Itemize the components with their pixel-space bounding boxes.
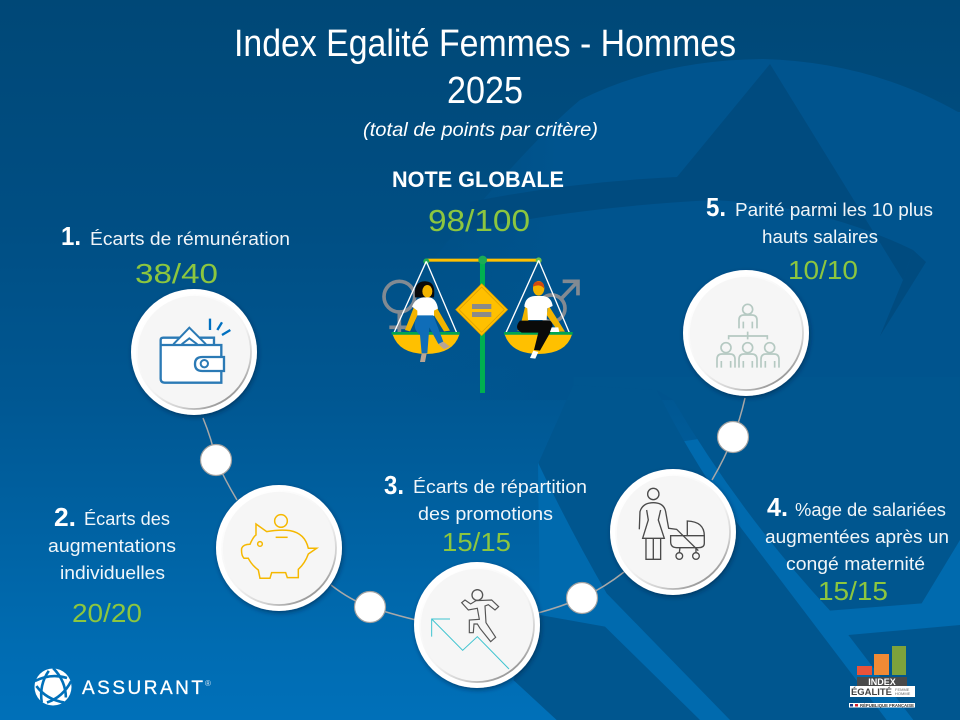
logo: Index Egalité: INDEX xyxy=(868,677,896,687)
logo: Index Egalité: RÉPUBLIQUE FRANÇAISE xyxy=(860,703,914,708)
score 4: 15/15 xyxy=(818,576,888,606)
icon: org chart xyxy=(717,304,779,368)
pole xyxy=(480,260,485,393)
logo: Assurant: ASSURANT xyxy=(82,678,203,699)
logo: Assurant xyxy=(34,667,211,706)
score 1: 38/40 xyxy=(135,258,218,289)
logo: Index Egalité: FEMME xyxy=(895,687,910,692)
right pan xyxy=(504,332,573,354)
criterion 3 label: Écarts de répartition xyxy=(413,477,587,497)
criterion 1 label: Écarts de rémunération xyxy=(90,229,290,249)
panel: maternity circle xyxy=(610,469,736,595)
criterion 3 label: des promotions xyxy=(418,504,553,524)
score 3: 15/15 xyxy=(442,527,511,557)
icon: Assurant mark xyxy=(34,667,74,706)
left pan xyxy=(392,332,460,354)
criterion 1 label xyxy=(61,221,290,251)
node 2 xyxy=(354,592,386,622)
node 1 xyxy=(200,444,232,476)
criterion 5 label xyxy=(706,192,933,247)
criterion 4 label xyxy=(765,492,949,574)
criterion 5 label: hauts salaires xyxy=(762,227,878,247)
criterion 2 label: augmentations xyxy=(48,536,176,556)
icon: female symbol xyxy=(384,281,415,333)
icon: male symbol xyxy=(538,281,578,322)
beam xyxy=(427,259,539,262)
global score: 98/100 xyxy=(428,203,530,238)
criterion 4 label: 4. xyxy=(767,492,788,522)
illustration: balance scale xyxy=(384,256,578,393)
title: Index Egalité Femmes - Hommes xyxy=(234,23,736,65)
panel: hierarchy circle xyxy=(683,270,809,396)
panel: piggy bank circle xyxy=(216,485,342,611)
criterion 2 label: individuelles xyxy=(60,563,165,583)
panel: promotion circle xyxy=(414,562,540,688)
subtitle: (total de points par critère) xyxy=(363,120,598,141)
criterion 4 label: congé maternité xyxy=(786,554,925,574)
strings xyxy=(394,260,569,333)
logo: Assurant: ® xyxy=(205,679,211,688)
criterion 4 label: %age de salariées xyxy=(795,500,946,520)
logo: Index Egalité xyxy=(849,646,915,708)
logo: Index Egalité: ÉGALITÉ xyxy=(851,687,892,697)
criterion 5 label: Parité parmi les 10 plus xyxy=(735,200,933,220)
panel: wallet circle xyxy=(131,289,257,415)
icon: runner on arrow xyxy=(432,590,509,669)
title: 2025 xyxy=(447,70,523,112)
heading: note globale: NOTE GLOBALE xyxy=(392,167,564,192)
score 2: 20/20 xyxy=(72,598,142,628)
score 5: 10/10 xyxy=(788,255,858,285)
node 4 xyxy=(718,422,748,452)
criterion 4 label: augmentées après un xyxy=(765,527,949,547)
criterion 2 label: 2. xyxy=(54,502,76,532)
criterion 2 label xyxy=(48,502,176,583)
logo: Index Egalité: HOMME xyxy=(895,691,911,696)
criterion 1 label: 1. xyxy=(61,221,81,251)
criterion 3 label xyxy=(384,470,587,524)
sign: equal xyxy=(456,284,508,336)
criterion 3 label: 3. xyxy=(384,470,404,500)
title xyxy=(234,23,736,112)
connector line xyxy=(203,398,745,620)
icon: wallet xyxy=(161,319,230,383)
node 3 xyxy=(566,582,598,614)
bars xyxy=(857,646,906,675)
icon: piggy bank xyxy=(242,515,317,578)
criterion 5 label: 5. xyxy=(706,192,726,222)
figure: man xyxy=(517,281,565,359)
criterion 2 label: Écarts des xyxy=(84,509,170,529)
icon: mother with pram xyxy=(639,488,704,559)
figure: woman xyxy=(405,281,450,362)
